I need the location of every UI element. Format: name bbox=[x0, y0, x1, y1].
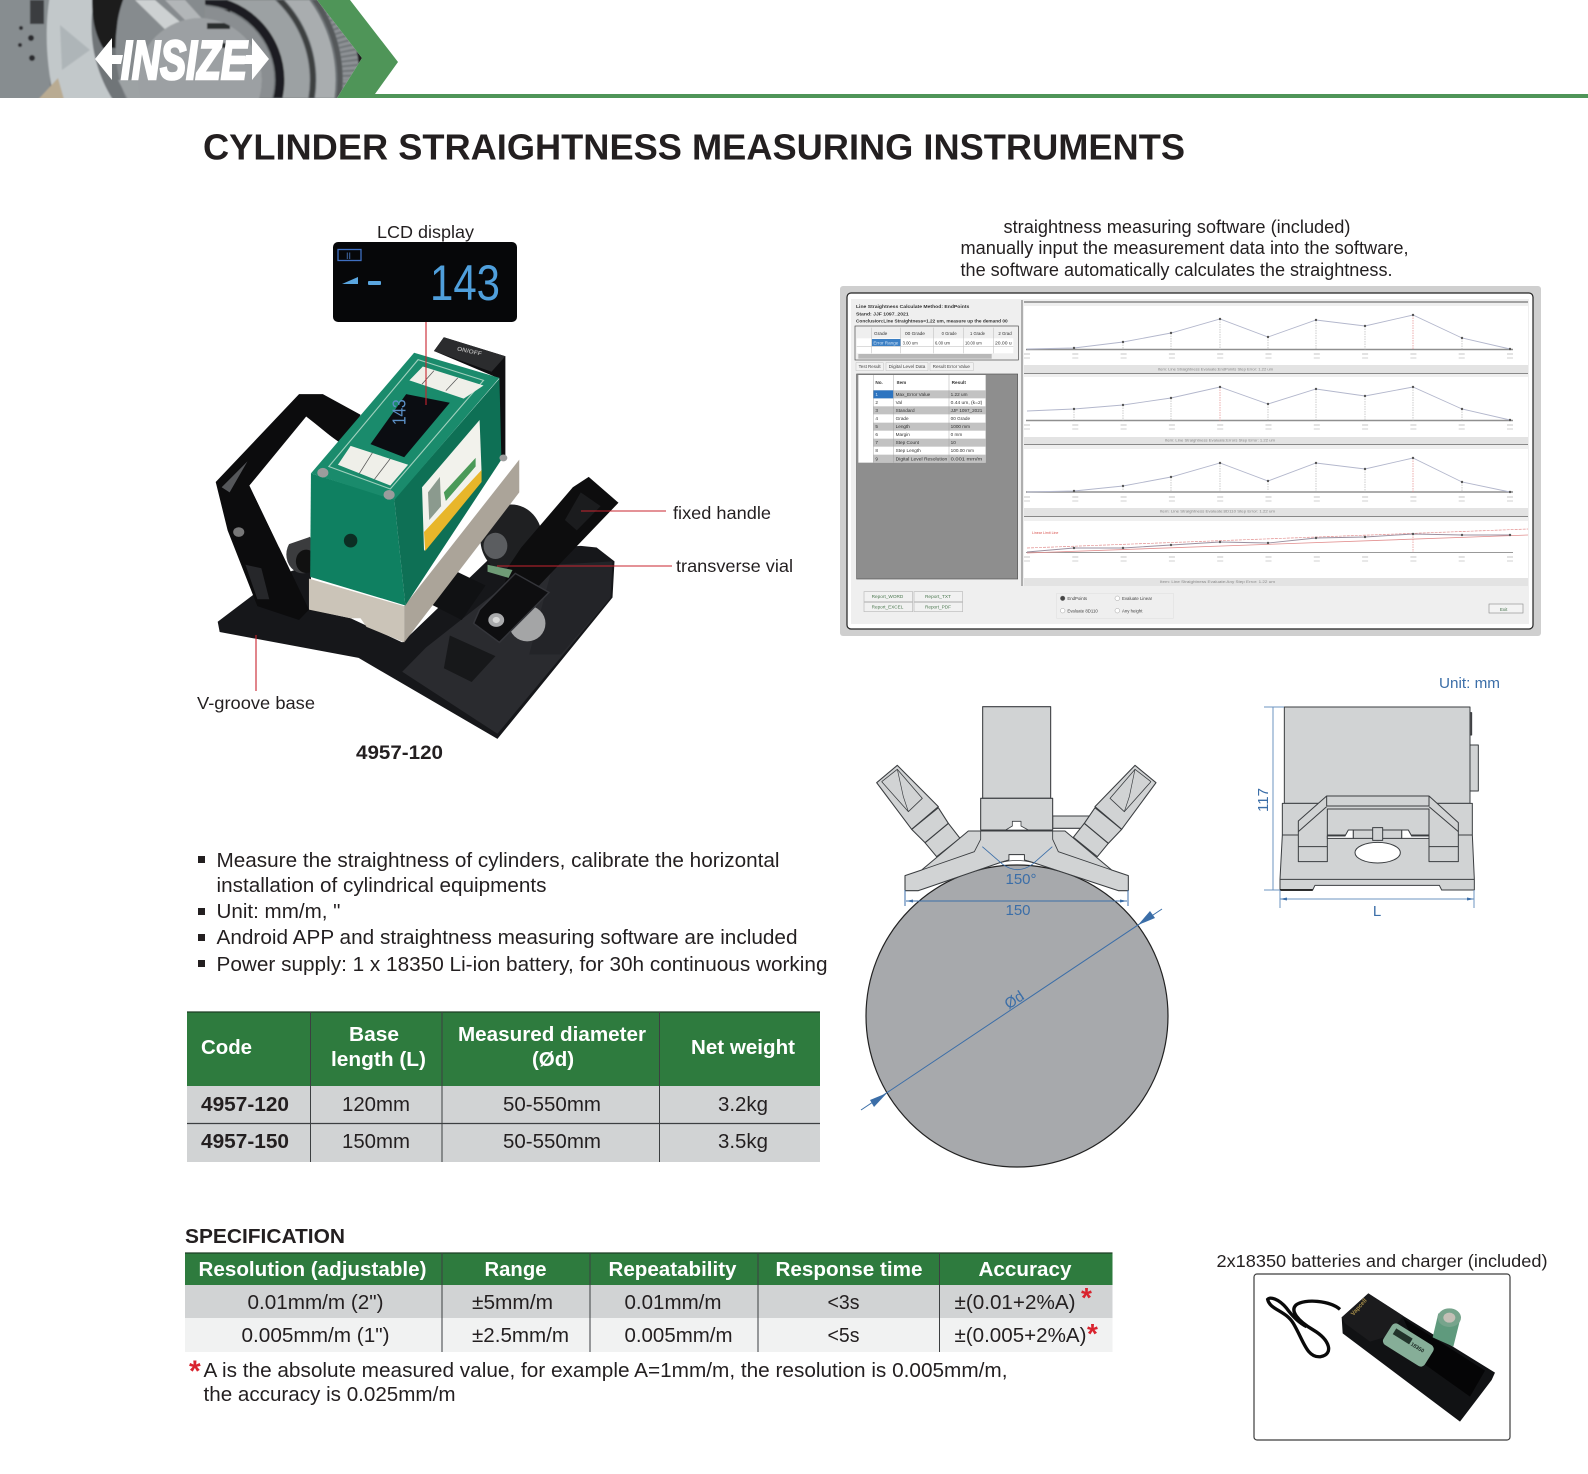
logo: INSIZE bbox=[121, 29, 249, 91]
report buttons bbox=[864, 592, 963, 612]
chart 4: Item: Line Straightness Evaluate:Any Step Error: 1.22 um bbox=[1160, 580, 1275, 584]
exit button: Exit bbox=[1500, 607, 1508, 612]
on/off switch bbox=[434, 337, 505, 460]
evaluation options: EndPoints bbox=[1067, 596, 1087, 601]
spec row 1: ±(0.01+2%A) bbox=[954, 1292, 1076, 1314]
tabs: Result Error Value bbox=[933, 364, 971, 369]
base shoulder bbox=[922, 831, 1112, 870]
spec row 2 bbox=[185, 1318, 1112, 1352]
green chevron bbox=[317, 0, 1588, 98]
chart 2: Item: Line Straightness Evaluate:Errors Step Error: 1.22 um bbox=[1165, 438, 1275, 442]
left handle bbox=[877, 765, 960, 857]
grade table: 6.00 um bbox=[935, 340, 950, 345]
row 4957-150 bbox=[187, 1124, 820, 1162]
result table: Val bbox=[896, 400, 902, 405]
right handle bbox=[428, 477, 618, 682]
result table: 00 Grade bbox=[951, 416, 970, 421]
groove notch bbox=[1000, 855, 1033, 863]
spec row 1: <3s bbox=[828, 1292, 860, 1314]
chart 3: Item: Line Straightness Evaluate:8D110 Step Error: 1.22 um bbox=[1160, 510, 1275, 514]
spec row 1: 0.01mm/m (2") bbox=[248, 1292, 384, 1314]
chart 4 bbox=[1024, 521, 1528, 586]
evaluation options: Evaluate Linear bbox=[1122, 596, 1153, 601]
row 4957-120 bbox=[187, 1086, 820, 1123]
row 4957-150: 50-550mm bbox=[503, 1131, 601, 1153]
result table: Grade bbox=[896, 416, 909, 421]
result table: Max_Error Value bbox=[896, 392, 931, 397]
result table: 3 bbox=[875, 408, 878, 413]
dimension: diameter bbox=[861, 909, 1162, 1110]
table header: Base bbox=[349, 1023, 399, 1046]
transverse vial bbox=[488, 565, 513, 578]
spec header: Resolution (adjustable) bbox=[198, 1259, 426, 1281]
result table: Result bbox=[952, 380, 966, 385]
left results panel bbox=[855, 304, 1173, 618]
feature list: Unit: mm/m, " bbox=[216, 901, 340, 923]
grade table: Error Range bbox=[873, 340, 899, 345]
tabs bbox=[856, 363, 973, 371]
row 4957-120: 120mm bbox=[342, 1094, 410, 1116]
steel block bbox=[309, 460, 519, 642]
result table: 1000 mm bbox=[951, 424, 970, 429]
grade table: Grade bbox=[874, 331, 888, 336]
table header bbox=[187, 1012, 820, 1086]
grade table: 2 Grad bbox=[998, 331, 1012, 336]
charging cable bbox=[1268, 1298, 1340, 1357]
column bbox=[983, 707, 1051, 798]
chart 1 bbox=[1024, 306, 1528, 374]
seated battery: 18350 bbox=[1409, 1342, 1425, 1355]
label: V-groove base: V-groove base bbox=[197, 693, 315, 713]
result table: 0.44 um, (k=2) bbox=[951, 400, 983, 405]
side tabs bbox=[1470, 713, 1472, 735]
chart 3 bbox=[1024, 449, 1528, 516]
spec row 2: ±2.5mm/m bbox=[472, 1325, 569, 1347]
left handle bbox=[216, 394, 361, 620]
LCD callout panel: II bbox=[346, 251, 351, 261]
footnote: A is the absolute measured value, for example A=1mm/m, the resolution is 0.005mm/m, bbox=[204, 1360, 1007, 1382]
top buttons bbox=[409, 367, 484, 399]
row 4957-150: 3.5kg bbox=[718, 1131, 768, 1153]
result table: 5 bbox=[875, 424, 878, 429]
report buttons: Report_PDF bbox=[925, 605, 951, 610]
body bbox=[1284, 707, 1470, 803]
charger panel bbox=[1254, 1274, 1510, 1440]
spec row 1 bbox=[185, 1282, 1112, 1318]
result table: Item bbox=[897, 380, 906, 385]
handle bridge bbox=[1053, 816, 1090, 828]
header banner bbox=[0, 0, 1588, 98]
specification table bbox=[185, 1253, 1112, 1352]
grade table: 10.00 um bbox=[965, 340, 982, 345]
result table: 100.00 mm bbox=[951, 448, 974, 453]
result table: 4 bbox=[875, 416, 878, 421]
result table: 1.22 um bbox=[951, 392, 968, 397]
report buttons: Report_EXCEL bbox=[872, 605, 904, 610]
software caption: the software automatically calculates the straightness. bbox=[960, 260, 1392, 280]
row 4957-150: 150mm bbox=[342, 1131, 410, 1153]
report buttons: Report_WORD bbox=[872, 594, 903, 599]
green housing bbox=[310, 353, 507, 605]
left results panel: Conclusion:Line Straightness=1.22 um, measure up the demand 00 bbox=[856, 319, 1008, 324]
spec row 1: 0.01mm/m bbox=[624, 1292, 722, 1314]
dimension: length L: L bbox=[1373, 903, 1381, 920]
feature list: Measure the straightness of cylinders, calibrate the horizontal bbox=[216, 850, 780, 872]
spec header: Repeatability bbox=[608, 1259, 737, 1281]
dimension: length L bbox=[1280, 890, 1474, 920]
spec row 1: * bbox=[1081, 1282, 1092, 1313]
result table: Step Length bbox=[896, 448, 921, 453]
footnote bbox=[189, 1355, 1007, 1406]
V-groove base bbox=[218, 535, 614, 739]
LCD callout panel: 143 bbox=[430, 255, 500, 311]
standing battery bbox=[1433, 1308, 1461, 1347]
block bbox=[981, 798, 1053, 830]
label: transverse vial: transverse vial bbox=[676, 556, 793, 576]
row 4957-150: 4957-150 bbox=[201, 1131, 289, 1153]
grade table bbox=[855, 326, 1018, 360]
model code: 4957-120 bbox=[356, 742, 443, 764]
dimension: diameter: Ød bbox=[1001, 988, 1028, 1013]
result table: Digital Level Resolution bbox=[896, 456, 948, 461]
row 4957-120: 50-550mm bbox=[503, 1094, 601, 1116]
v-groove base bbox=[905, 831, 1128, 891]
result table: 0 mm bbox=[951, 432, 962, 437]
label: LCD display: LCD display bbox=[377, 222, 474, 242]
block notch bbox=[1006, 821, 1028, 830]
spec row 1: ±5mm/m bbox=[472, 1292, 553, 1314]
spec row 2: ±(0.005+2%A) bbox=[954, 1325, 1086, 1347]
oval hole bbox=[1355, 842, 1400, 863]
result table: Length bbox=[896, 424, 910, 429]
footnote: * bbox=[189, 1355, 201, 1388]
tabs: Digital Level Data bbox=[889, 364, 926, 369]
product photo: device 4957-120 bbox=[216, 337, 618, 739]
feature list: Power supply: 1 x 18350 Li-ion battery, for 30h continuous working bbox=[216, 954, 828, 976]
charger panel: Vapcell bbox=[1350, 1298, 1369, 1317]
left results panel: Stand: JJF 1097_2021 bbox=[856, 312, 909, 317]
spec header: Accuracy bbox=[978, 1259, 1072, 1281]
exit button bbox=[1489, 604, 1523, 613]
spec header: Response time bbox=[776, 1259, 922, 1281]
green housing: 143 bbox=[389, 399, 410, 425]
grade table: 0 Grade bbox=[942, 331, 957, 336]
grade table: 20.00 u bbox=[995, 340, 1012, 345]
spec row 2: 0.005mm/m (1") bbox=[242, 1325, 390, 1347]
chart 4: Linear Limit Line bbox=[1032, 531, 1058, 535]
spec row 2: 0.005mm/m bbox=[624, 1325, 732, 1347]
banner: machinery photo bbox=[0, 0, 362, 98]
chart 1: Item: Line Straightness Evaluate:EndPoints Step Error: 1.22 um bbox=[1158, 368, 1273, 372]
spec row 2: <5s bbox=[828, 1325, 860, 1347]
side label bbox=[422, 420, 482, 551]
angle dimension bbox=[982, 847, 1052, 870]
result table: Margin bbox=[896, 432, 910, 437]
result table: JJF 1097_2021 bbox=[951, 408, 983, 413]
result table: 8 bbox=[875, 448, 878, 453]
result table: 0.001 mm/m bbox=[951, 456, 982, 461]
spec header: Range bbox=[484, 1259, 546, 1281]
feature list: Android APP and straightness measuring software are included bbox=[216, 927, 797, 949]
software caption: manually input the measurement data into the software, bbox=[960, 238, 1408, 258]
software screenshot panel bbox=[840, 286, 1541, 636]
table header: (Ød) bbox=[532, 1048, 574, 1071]
left results panel: Line Straightness Calculate Method: EndPoints bbox=[856, 304, 970, 309]
feature list bbox=[198, 850, 828, 976]
feature list: installation of cylindrical equipments bbox=[216, 875, 546, 897]
evaluation options: Any height bbox=[1122, 608, 1143, 613]
evaluation options: Evaluate 8D110 bbox=[1067, 608, 1098, 613]
front view drawing bbox=[861, 707, 1168, 1167]
result table: 6 bbox=[875, 432, 878, 437]
software caption: straightness measuring software (included) bbox=[1004, 217, 1350, 237]
seated battery bbox=[1381, 1322, 1436, 1368]
base bbox=[1280, 803, 1474, 890]
grade table: 1 Grade bbox=[970, 331, 985, 336]
report buttons: Report_TXT bbox=[925, 594, 951, 599]
device screen bbox=[370, 394, 450, 457]
software caption bbox=[960, 217, 1408, 280]
specification heading: SPECIFICATION bbox=[185, 1226, 345, 1248]
footnote: the accuracy is 0.025mm/m bbox=[204, 1384, 456, 1406]
result table: 9 bbox=[875, 456, 878, 461]
title: CYLINDER STRAIGHTNESS MEASURING INSTRUMENTS bbox=[203, 126, 1185, 168]
table header: length (L) bbox=[331, 1048, 426, 1071]
row 4957-120: 4957-120 bbox=[201, 1094, 289, 1116]
cylinder bbox=[866, 865, 1168, 1167]
grade table: 3.00 um bbox=[903, 340, 918, 345]
screws and port bbox=[317, 468, 328, 478]
right handle bbox=[1073, 765, 1156, 857]
label: fixed handle: fixed handle bbox=[673, 503, 771, 523]
chart 2 bbox=[1024, 377, 1528, 444]
grade table: 00 Grade bbox=[905, 331, 925, 336]
LCD callout panel bbox=[333, 242, 517, 322]
unit label: Unit: mm bbox=[1439, 675, 1500, 692]
result table: 1 bbox=[875, 392, 878, 397]
result table: 10 bbox=[951, 440, 956, 445]
handle bbox=[1298, 796, 1458, 862]
result table: 7 bbox=[875, 440, 878, 445]
result table: Step Count bbox=[896, 440, 920, 445]
dimension: height 117: 117 bbox=[1255, 788, 1272, 812]
row 4957-120: 3.2kg bbox=[718, 1094, 768, 1116]
table header: Net weight bbox=[691, 1036, 795, 1059]
side view drawing bbox=[1255, 707, 1478, 920]
tabs: Test Result bbox=[859, 364, 881, 369]
table header: Code bbox=[201, 1036, 252, 1059]
callout lines bbox=[256, 322, 672, 691]
on/off switch: ON/OFF bbox=[456, 346, 483, 358]
spec row 2: * bbox=[1087, 1318, 1098, 1349]
charger caption: 2x18350 batteries and charger (included) bbox=[1216, 1251, 1548, 1271]
result table: Standard bbox=[896, 408, 915, 413]
charger body bbox=[1342, 1293, 1495, 1422]
center mechanism bbox=[1327, 828, 1429, 840]
result table: 2 bbox=[875, 400, 878, 405]
product table bbox=[187, 1012, 820, 1162]
dimension: width 150: 150 bbox=[1005, 902, 1031, 919]
result table: No. bbox=[875, 380, 883, 385]
label: 150 degrees: 150° bbox=[1005, 871, 1037, 888]
result table bbox=[857, 374, 1018, 579]
table header: Measured diameter bbox=[458, 1023, 646, 1046]
dimension: width 150 bbox=[905, 890, 1128, 919]
spec header bbox=[185, 1253, 1112, 1285]
evaluation options bbox=[1057, 593, 1173, 618]
